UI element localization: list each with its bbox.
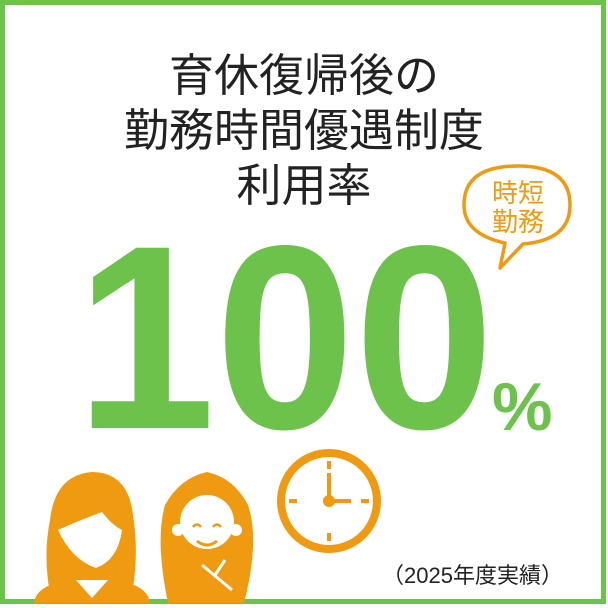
title: 育休復帰後の [169,50,439,101]
percent: % [492,369,552,445]
icon: woman [34,472,150,603]
note: （2025年度実績） [382,563,563,588]
title: 勤務時間優遇制度 [124,105,484,156]
speech bubble: 勤務 [492,207,544,237]
title [124,50,484,211]
icon: clock [281,453,377,549]
icon: baby [161,472,253,603]
big number: 100 [76,191,494,484]
title: 利用率 [236,160,372,211]
speech bubble: 時短 [492,178,544,208]
speech bubble [464,166,570,268]
